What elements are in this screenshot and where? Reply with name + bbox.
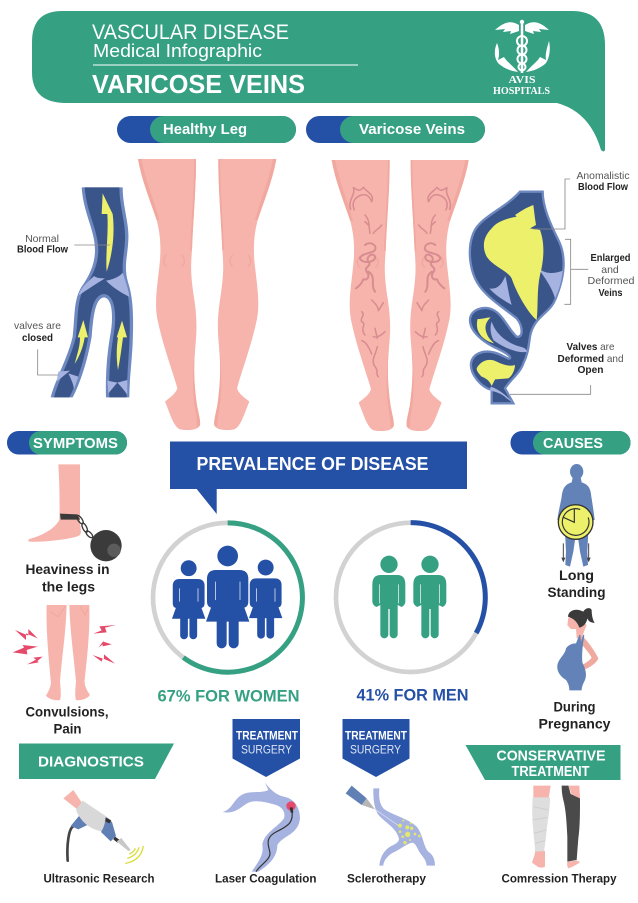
label: valves deformed and open: Valves are	[566, 341, 615, 353]
icon: women figures	[172, 546, 282, 648]
badge: treatment surgery right: SURGERY	[350, 744, 401, 756]
label: valves closed: valves are	[14, 320, 61, 332]
diagram: varicose vein	[470, 179, 591, 403]
label: normal blood flow: Blood Flow	[17, 244, 69, 256]
label: normal blood flow	[17, 233, 69, 256]
chart: women 67 percent ring	[153, 523, 302, 672]
pill: causes	[510, 431, 630, 454]
text: convulsions, pain: Convulsions,	[26, 704, 108, 720]
label: enlarged and deformed veins: and	[601, 264, 619, 276]
label: enlarged and deformed veins	[588, 252, 635, 299]
text: 67% for women: 67% FOR WOMEN	[158, 688, 300, 706]
icon: ultrasound probe	[63, 790, 143, 863]
label: enlarged and deformed veins: Veins	[598, 287, 623, 299]
text: ultrasonic research: Ultrasonic Research	[44, 872, 154, 886]
anomalous flow	[477, 205, 543, 386]
text: heaviness in the legs: Heaviness in	[26, 561, 110, 577]
pill: healthy leg: Healthy Leg	[163, 122, 247, 138]
text: heaviness in the legs	[26, 561, 110, 594]
text: convulsions, pain	[26, 704, 108, 736]
text: during pregnancy: Pregnancy	[538, 716, 611, 732]
text: laser coagulation: Laser Coagulation	[215, 872, 316, 886]
banner: conservative treatment: CONSERVATIVE	[496, 748, 606, 764]
text: compression therapy: Comression Therapy	[502, 872, 617, 886]
label: valves deformed and open	[558, 341, 624, 376]
label: valves closed: closed	[22, 332, 53, 344]
icon: sclerotherapy	[346, 786, 435, 866]
callout: prevalence of disease	[170, 442, 467, 514]
chart: men 41 percent ring	[336, 523, 485, 672]
deformed valves	[489, 268, 563, 403]
pain bolts	[13, 625, 116, 664]
badge: treatment surgery left: SURGERY	[241, 744, 292, 756]
valves	[57, 273, 129, 395]
icon: pregnant woman	[557, 608, 598, 690]
badge: treatment surgery right	[342, 719, 410, 777]
label: normal blood flow: Normal	[25, 233, 59, 245]
pill: symptoms	[7, 431, 127, 454]
icon: hospital logo: AVIS	[508, 75, 536, 86]
icon: hospital logo: HOSPITALS	[493, 86, 550, 97]
label: anomalistic blood flow: Anomalistic	[576, 170, 630, 182]
badge: treatment surgery left: TREATMENT	[236, 730, 298, 742]
illustration: varicose legs	[332, 160, 469, 431]
text: convulsions, pain: Pain	[54, 720, 82, 736]
text: during pregnancy	[538, 698, 611, 732]
foam bubbles	[398, 820, 421, 844]
icon: men figures	[372, 556, 446, 638]
text: long standing: Long	[559, 567, 594, 583]
illustration: healthy legs	[138, 159, 276, 430]
banner: diagnostics: DIAGNOSTICS	[38, 754, 144, 770]
text: sclerotherapy: Sclerotherapy	[347, 872, 426, 886]
icon: ankle with ball and chain	[28, 464, 122, 561]
header banner	[32, 11, 605, 152]
pill: healthy leg	[117, 116, 296, 143]
callout: prevalence of disease: PREVALENCE OF DISEASE	[196, 454, 428, 474]
icon: painful legs	[13, 605, 116, 700]
label: valves closed	[14, 320, 61, 344]
text: long standing	[548, 567, 606, 600]
pill: causes: CAUSES	[543, 435, 603, 452]
main title: VARICOSE VEINS	[92, 69, 305, 99]
label: valves deformed and open: Deformed and	[558, 353, 624, 365]
badge: treatment surgery left	[232, 719, 300, 777]
flow arrows	[75, 193, 127, 370]
banner: conservative treatment	[466, 745, 620, 780]
label: enlarged and deformed veins: Deformed	[588, 275, 635, 287]
badge: treatment surgery right: TREATMENT	[345, 730, 407, 742]
needle	[346, 786, 367, 805]
label: anomalistic blood flow: Blood Flow	[578, 181, 629, 193]
diagram: normal vein	[38, 187, 133, 397]
icon: laser coagulation	[223, 783, 300, 872]
text: long standing: Standing	[548, 584, 606, 600]
subtitle: Medical Infographic	[93, 41, 262, 61]
icon: compression legs	[532, 786, 580, 868]
icon: hospital logo	[493, 20, 550, 97]
banner: conservative treatment: TREATMENT	[512, 763, 590, 780]
icon: long standing person with clock	[557, 464, 595, 567]
ultrasonic waves	[125, 846, 143, 863]
pill: symptoms: SYMPTOMS	[33, 435, 118, 452]
text: 41% for men: 41% FOR MEN	[356, 686, 468, 704]
pill: varicose veins	[306, 116, 485, 143]
label: anomalistic blood flow	[576, 170, 630, 193]
label: valves deformed and open: Open	[578, 364, 604, 376]
label: enlarged and deformed veins: Enlarged	[590, 252, 630, 264]
text: heaviness in the legs: the legs	[42, 578, 95, 594]
banner: diagnostics	[19, 744, 174, 779]
title: vascular disease: VASCULAR DISEASE	[92, 21, 289, 44]
pill: varicose veins: Varicose Veins	[359, 122, 465, 138]
text: during pregnancy: During	[554, 698, 596, 714]
